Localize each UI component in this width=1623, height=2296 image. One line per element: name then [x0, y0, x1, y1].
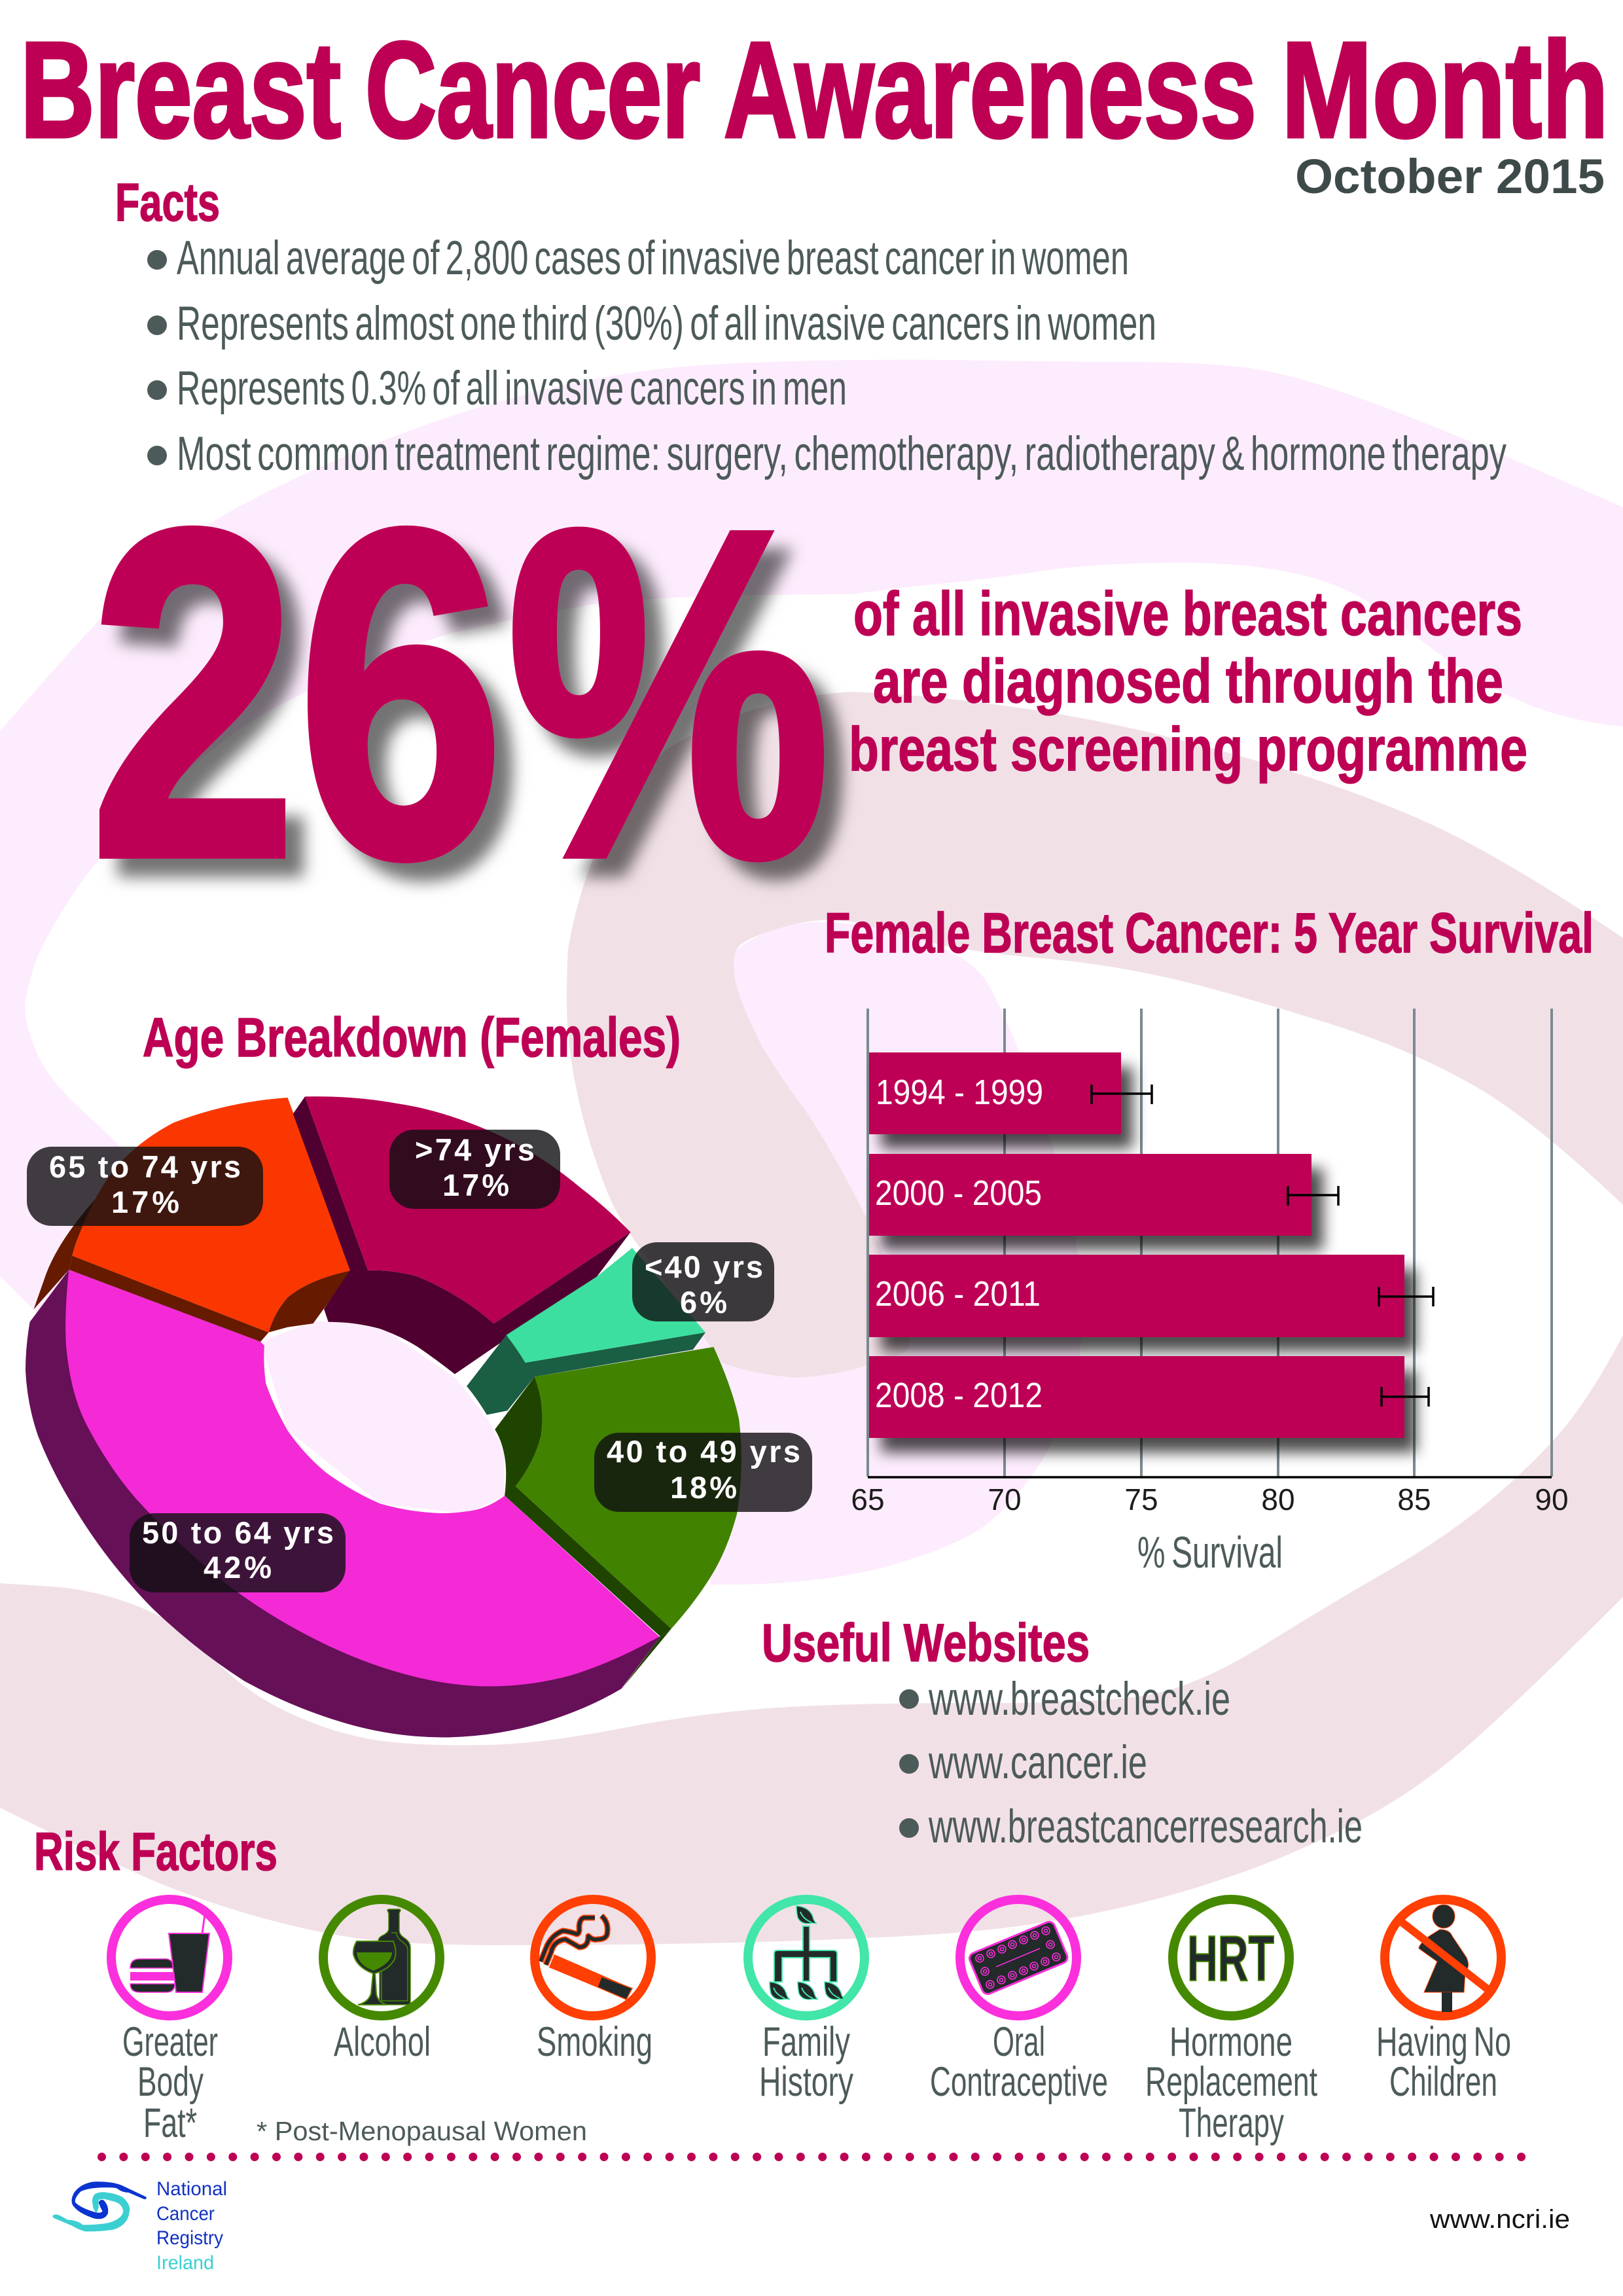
bars: [869, 1052, 1404, 1438]
icon: wine bottle and glass: [323, 1899, 440, 2016]
label: 65 to 74 yrs: [27, 1147, 263, 1226]
label: under 40 yrs: <40 yrs: [645, 1249, 763, 1284]
label: 50 to 64 yrs: 50 to 64 yrs: [142, 1515, 334, 1550]
slice: 40 to 49 side: [495, 1376, 671, 1636]
website list: www.breastcheck.ie: [928, 1674, 1230, 1725]
slice: 65 to 74 side: [33, 1191, 351, 1342]
icon: contraceptive pill pack: [960, 1899, 1077, 2016]
label: 40 to 49 yrs: 40 to 49 yrs: [607, 1434, 800, 1469]
slice: over 74: [305, 1096, 631, 1323]
heading: age breakdown: Age Breakdown (Females): [143, 1007, 681, 1068]
heading: facts: Facts: [115, 173, 220, 232]
icon: HRT: HRT: [1187, 1922, 1274, 1994]
website list: www.breastcancerresearch.ie: [928, 1801, 1363, 1853]
title: Breast: [20, 14, 341, 166]
website list: www.cancer.ie: [928, 1737, 1147, 1789]
fact bullets: [147, 232, 1507, 480]
logo: National Cancer Registry Ireland: [52, 2178, 227, 2274]
label: over 74 yrs: 17%: [442, 1168, 509, 1202]
big statistic: 26%: [90, 433, 830, 954]
icon labels: Body: [137, 2059, 204, 2105]
slice: under 40: [507, 1248, 705, 1363]
axis tick labels: 90: [1535, 1482, 1569, 1516]
error bars: [1092, 1085, 1433, 1407]
slice: over 74 side: [293, 1096, 631, 1374]
icon labels: Oral: [993, 2019, 1045, 2065]
date: October 2015: [1295, 149, 1605, 204]
icon: cigarette: [535, 1899, 651, 2016]
icon: family tree: [748, 1899, 865, 2016]
bar labels: 1994 - 1999: [876, 1073, 1043, 1112]
icon labels: Hormone: [1169, 2019, 1293, 2065]
label: 40 to 49 yrs: 18%: [670, 1470, 737, 1505]
logo: National Cancer Registry Ireland: National: [156, 2178, 227, 2200]
fact bullets: Represents 0.3% of all invasive cancers in men: [177, 362, 847, 415]
icon labels: Smoking: [537, 2019, 652, 2065]
slice: 65 to 74: [72, 1098, 351, 1333]
icon labels: History: [759, 2059, 853, 2105]
panel: risk factors: [34, 1822, 1511, 2146]
heading: risk factors: Risk Factors: [34, 1822, 277, 1882]
icon: burger and drink: [111, 1899, 228, 2016]
label: 40 to 49 yrs: [594, 1433, 812, 1512]
axis tick labels: 70: [988, 1482, 1022, 1516]
bar chart: 5 year survival: [851, 1009, 1569, 1577]
big statistic: 26%: %: [507, 433, 830, 954]
bar labels: 2008 - 2012: [875, 1376, 1043, 1415]
donut chart: age breakdown: [26, 1096, 812, 1737]
icon labels: Greater: [122, 2019, 218, 2065]
icon labels: Fat*: [143, 2100, 197, 2146]
logo: National Cancer Registry Ireland: Registry: [156, 2227, 223, 2249]
title: [20, 14, 1609, 166]
axis tick labels: 80: [1261, 1482, 1295, 1516]
axis tick labels: 65: [851, 1482, 885, 1516]
label: 65 to 74 yrs: 17%: [111, 1185, 179, 1219]
axis title: % Survival: [1137, 1528, 1283, 1577]
title: Awareness: [724, 14, 1257, 166]
icon labels: Contraceptive: [930, 2059, 1108, 2105]
fact bullets: Represents almost one third (30%) of all invasive cancers in women: [177, 297, 1156, 350]
title: Cancer: [365, 14, 700, 166]
heading: useful websites: Useful Websites: [762, 1613, 1090, 1673]
icon labels: Family: [762, 2019, 850, 2065]
icon: logo swirl: [52, 2181, 147, 2231]
slice side: 50 to 64: [26, 1270, 660, 1737]
statistic caption: [849, 579, 1527, 784]
logo: National Cancer Registry Ireland: Cancer: [156, 2203, 215, 2225]
icon labels: Replacement: [1145, 2059, 1317, 2105]
icon labels: Having No: [1376, 2019, 1511, 2065]
label: over 74 yrs: [389, 1130, 560, 1209]
label: 50 to 64 yrs: 42%: [204, 1550, 272, 1585]
label: over 74 yrs: >74 yrs: [415, 1132, 535, 1167]
footnote: * Post-Menopausal Women: [257, 2116, 587, 2146]
bar labels: 2006 - 2011: [875, 1274, 1041, 1314]
panel: facts: [115, 173, 1507, 480]
panel: useful websites: [762, 1613, 1363, 1853]
icon: pregnant woman crossed out: [1385, 1899, 1501, 2016]
label: 65 to 74 yrs: 65 to 74 yrs: [49, 1149, 241, 1184]
website list: [899, 1674, 1363, 1853]
fact bullets: Annual average of 2,800 cases of invasive breast cancer in women: [177, 232, 1129, 285]
label: 50 to 64 yrs: [130, 1513, 346, 1592]
slice: under 40 side: [467, 1333, 705, 1415]
axis tick labels: [851, 1482, 1569, 1516]
icon labels: Therapy: [1179, 2100, 1284, 2146]
logo: National Cancer Registry Ireland: Ireland: [156, 2252, 214, 2274]
slice: 50 to 64: [65, 1270, 659, 1686]
icon: HRT: [1173, 1899, 1289, 2016]
label: under 40 yrs: 6%: [680, 1285, 727, 1319]
bar labels: 2000 - 2005: [875, 1174, 1042, 1213]
axis tick labels: 75: [1124, 1482, 1158, 1516]
big statistic: 26%: 26: [90, 433, 505, 954]
icon labels: Alcohol: [334, 2019, 431, 2065]
icon labels: [122, 2019, 1511, 2146]
footer url: www.ncri.ie: [1429, 2205, 1570, 2234]
bar labels: [875, 1073, 1043, 1415]
slice: 40 to 49: [516, 1347, 741, 1629]
label: under 40 yrs: [632, 1242, 774, 1321]
icon labels: Children: [1389, 2059, 1497, 2105]
axis tick labels: 85: [1397, 1482, 1431, 1516]
